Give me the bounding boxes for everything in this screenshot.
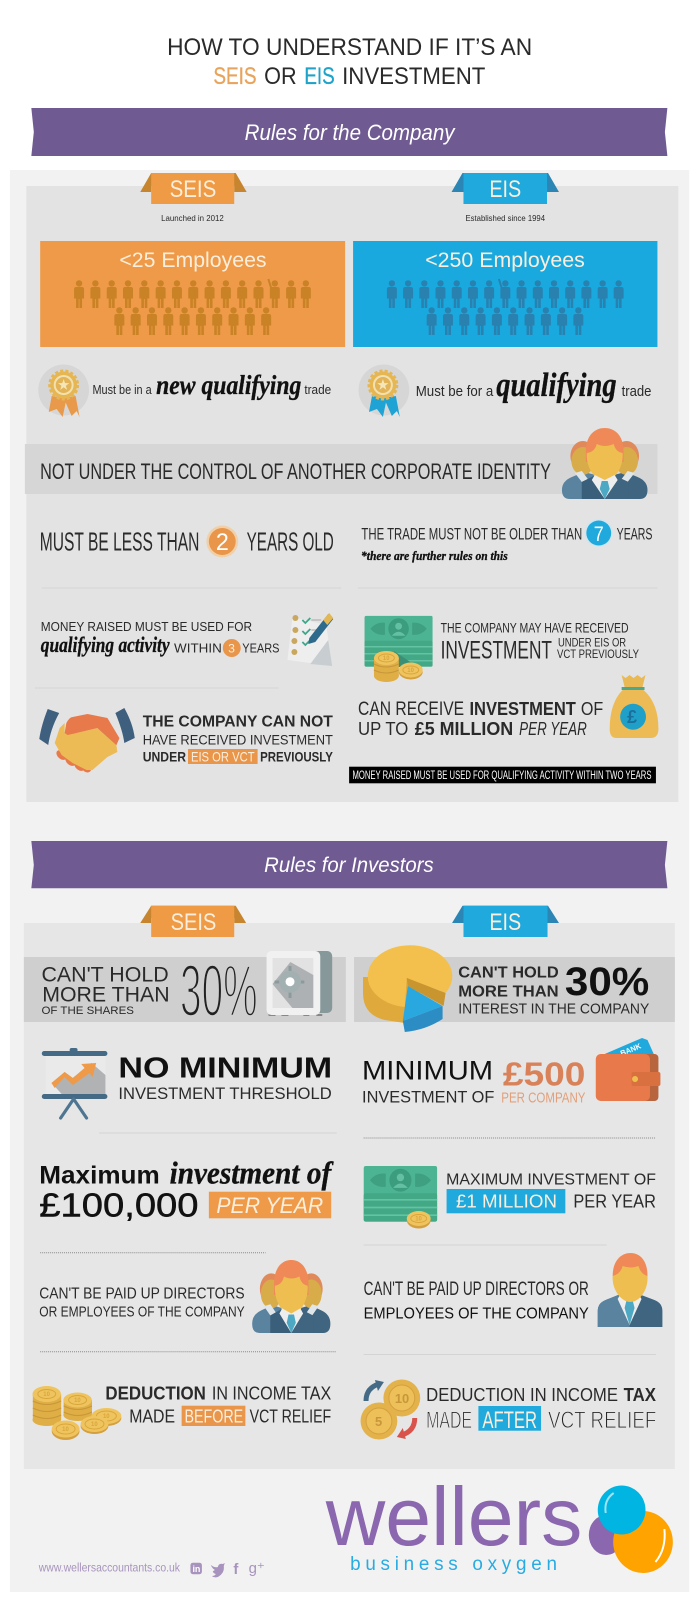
established date: Established since 1994 — [465, 213, 545, 223]
logo: wellers: business oxygen — [350, 1554, 557, 1575]
SEIS ribbon: SEIS — [170, 176, 216, 203]
panel: investor rules — [24, 906, 675, 1469]
SEIS ribbon: SEIS — [171, 909, 216, 936]
icon: pie chart — [363, 945, 452, 1032]
icon: coins with arrows: 10 — [395, 1391, 409, 1406]
people icons: SEIS — [74, 279, 311, 335]
icon: coin stacks: 10 — [43, 1392, 51, 1398]
icon: banknotes with coin: 10 — [415, 1216, 423, 1223]
trade not older than 7 years: *there are further rules on this — [361, 548, 508, 563]
company can not text — [143, 714, 333, 765]
new qualifying trade text: Must be in a — [92, 382, 152, 397]
deduction before text: BEFORE — [184, 1407, 243, 1427]
paid up directors text SEIS: OR EMPLOYEES OF THE COMPANY — [39, 1304, 245, 1321]
icon: banknotes with coin — [364, 1166, 437, 1228]
icon: business group — [562, 428, 647, 499]
strip: SEIS 30 percent: MORE THAN — [42, 984, 170, 1007]
strip: EIS 30 percent: 30% — [565, 960, 649, 1004]
deduction after text: VCT RELIEF — [548, 1407, 656, 1434]
footer website and social icons: f — [233, 1561, 238, 1578]
company can not text: HAVE RECEIVED INVESTMENT — [143, 731, 333, 747]
title: INVESTMENT — [342, 63, 486, 90]
deduction before text: DEDUCTION — [105, 1383, 206, 1403]
EIS ribbon: EIS — [489, 909, 521, 936]
footer website and social icons: g⁺ — [249, 1560, 265, 1577]
may have received investment text: THE COMPANY MAY HAVE RECEIVED — [441, 620, 629, 636]
minimum 500 text: £500 — [503, 1056, 585, 1093]
maximum 1 million text: MAXIMUM INVESTMENT OF — [446, 1171, 656, 1188]
strip: not under control — [25, 444, 657, 494]
may have received investment text: INVESTMENT — [441, 636, 552, 664]
icon: handshake — [39, 708, 135, 774]
new qualifying trade text: new qualifying — [156, 370, 301, 400]
receive up to 5 million text: INVESTMENT — [469, 699, 576, 719]
may have received investment text — [441, 620, 639, 664]
money raised text: MONEY RAISED MUST BE USED FOR — [41, 619, 252, 634]
icon: money bag: £ — [627, 707, 637, 727]
qualifying trade text: Must be for a — [416, 383, 494, 400]
deduction before text: VCT RELIEF — [250, 1407, 331, 1427]
logo: wellers — [325, 1470, 673, 1575]
maximum 1 million text: £1 MILLION — [456, 1192, 557, 1212]
maximum 1 million text — [446, 1171, 656, 1213]
maximum 1 million text: PER YEAR — [573, 1192, 656, 1212]
icon: coin stacks — [33, 1386, 121, 1440]
icon: business group — [252, 1260, 330, 1333]
icon: coin stacks: 10 — [74, 1398, 81, 1404]
company can not text: PREVIOUSLY — [260, 749, 333, 765]
company can not text: EIS OR VCT — [191, 749, 255, 765]
EIS ribbon: EIS — [489, 176, 521, 203]
banner: rules for the company: Rules for the Company — [245, 120, 456, 145]
deduction after text: TAX — [624, 1385, 656, 1405]
banner: rules for the company — [31, 108, 667, 156]
receive up to 5 million text: PER YEAR — [519, 719, 587, 739]
dotted divider — [364, 1137, 656, 1139]
strip: SEIS 30 percent — [24, 951, 346, 1032]
icon: coins with arrows — [361, 1380, 420, 1440]
title: SEIS — [213, 63, 257, 90]
people icons: EIS — [387, 279, 624, 335]
icon: single business person — [598, 1253, 662, 1327]
money raised text — [41, 619, 280, 657]
minimum 500 text: INVESTMENT OF — [362, 1087, 494, 1106]
EIS employees box: <250 Employees — [425, 249, 585, 272]
deduction after text: AFTER — [482, 1407, 537, 1434]
trade not older than 7 years: THE TRADE MUST NOT BE OLDER THAN — [361, 524, 582, 544]
trade not older than 7 years: YEARS — [617, 524, 652, 544]
dotted divider — [40, 1351, 336, 1353]
launched date: Launched in 2012 — [161, 213, 224, 223]
must be less than 2 years: 2 — [216, 529, 229, 556]
money raised text: 3 — [228, 641, 235, 656]
qualifying trade text: trade — [622, 383, 651, 400]
no minimum text — [118, 1052, 332, 1103]
maximum 100000 text: investment of — [170, 1155, 334, 1190]
paid up directors text SEIS — [39, 1285, 245, 1321]
icon: safe — [267, 951, 332, 1016]
minimum 500 text: MINIMUM — [362, 1055, 493, 1085]
maximum 100000 text — [39, 1155, 334, 1224]
deduction after text — [426, 1385, 656, 1434]
icon: clipboard — [287, 613, 333, 666]
strip: SEIS 30 percent: OF THE SHARES — [41, 1005, 134, 1017]
new qualifying trade text: trade — [304, 382, 331, 397]
money raised text: qualifying activity — [41, 632, 170, 657]
panel: company rules — [25, 173, 678, 802]
SEIS employees box: <25 Employees — [119, 249, 267, 272]
strip: SEIS 30 percent: 30% — [180, 951, 258, 1032]
EIS employees box — [353, 241, 657, 347]
may have received investment text: VCT PREVIOUSLY — [557, 647, 639, 661]
paid up directors text EIS — [364, 1279, 589, 1322]
company can not text: THE COMPANY CAN NOT — [143, 714, 333, 731]
footer website and social icons: in — [192, 1564, 200, 1574]
logo: wellers: wellers — [325, 1470, 582, 1563]
SEIS employees box — [40, 241, 345, 347]
may have received investment text: UNDER EIS OR — [558, 636, 626, 650]
paid up directors text SEIS: CAN'T BE PAID UP DIRECTORS — [39, 1285, 245, 1302]
icon: wallet — [596, 1038, 660, 1101]
title — [167, 34, 532, 90]
icon: coin stacks: 10 — [91, 1422, 98, 1428]
dotted divider — [40, 1252, 266, 1254]
icon: coins with arrows: 5 — [375, 1414, 382, 1429]
receive up to 5 million text: UP TO — [358, 719, 408, 739]
icon: wallet: BANK — [619, 1041, 643, 1058]
footer website and social icons — [38, 1560, 265, 1578]
icon: orange award — [38, 364, 89, 417]
icon: banknotes and coins — [365, 616, 433, 682]
icon: banknotes and coins: 10 — [383, 656, 390, 662]
maximum 100000 text: Maximum — [39, 1161, 160, 1189]
SEIS ribbon — [140, 906, 246, 937]
qualifying trade text: qualifying — [496, 367, 617, 404]
title: EIS — [304, 63, 335, 90]
SEIS ribbon — [140, 173, 247, 204]
strip: EIS 30 percent: MORE THAN — [458, 984, 559, 1001]
icon: coin stacks: 10 — [103, 1414, 110, 1420]
qualifying trade text — [416, 367, 651, 404]
maximum 100000 text: £100,000 — [39, 1187, 199, 1224]
paid up directors text EIS: CAN'T BE PAID UP DIRECTORS OR — [364, 1279, 589, 1300]
receive up to 5 million text: £5 MILLION — [415, 719, 513, 739]
banner: rules for investors: Rules for Investors — [264, 854, 434, 877]
no minimum text: NO MINIMUM — [118, 1052, 332, 1084]
icon: money bag — [610, 675, 658, 738]
must be less than 2 years: YEARS OLD — [247, 528, 334, 557]
title: HOW TO UNDERSTAND IF IT’S AN — [167, 34, 532, 61]
maximum 100000 text: PER YEAR — [216, 1193, 323, 1218]
strip: SEIS 30 percent: CAN'T HOLD — [41, 964, 169, 987]
money raised text: WITHIN — [174, 641, 222, 656]
trade not older than 7 years: 7 — [594, 523, 604, 546]
strip: EIS 30 percent — [354, 957, 675, 1022]
new qualifying trade text — [92, 370, 331, 400]
EIS ribbon — [452, 173, 559, 204]
strip: EIS 30 percent: CAN'T HOLD — [458, 965, 559, 982]
icon: banknotes and coins: 10 — [407, 668, 415, 674]
deduction after text: DEDUCTION IN INCOME — [426, 1385, 618, 1405]
trade not older than 7 years — [361, 519, 652, 563]
receive up to 5 million text — [358, 699, 603, 739]
icon: coin stacks: 10 — [62, 1427, 69, 1433]
minimum 500 text — [362, 1055, 585, 1106]
deduction after text: MADE — [426, 1407, 472, 1434]
company can not text: UNDER — [143, 749, 186, 765]
receive up to 5 million text: OF — [581, 699, 603, 719]
icon: presentation chart — [42, 1048, 107, 1118]
title: OR — [264, 63, 297, 90]
paid up directors text EIS: EMPLOYEES OF THE COMPANY — [364, 1305, 589, 1322]
deduction before text: MADE — [129, 1407, 175, 1427]
EIS ribbon — [452, 906, 559, 937]
strip: EIS 30 percent: INTEREST IN THE COMPANY — [458, 1000, 649, 1017]
receive up to 5 million text: CAN RECEIVE — [358, 699, 464, 720]
deduction before text: IN INCOME TAX — [212, 1383, 331, 1403]
money raised text: YEARS — [242, 641, 280, 656]
logo balloons — [589, 1486, 673, 1573]
must be less than 2 years: MUST BE LESS THAN — [40, 528, 199, 557]
banner: rules for investors — [31, 841, 667, 888]
deduction before text — [105, 1383, 331, 1427]
no minimum text: INVESTMENT THRESHOLD — [118, 1084, 332, 1103]
footer website and social icons: www.wellersaccountants.co.uk — [38, 1561, 180, 1575]
icon: blue award — [359, 364, 409, 417]
minimum 500 text: PER COMPANY — [501, 1089, 585, 1106]
